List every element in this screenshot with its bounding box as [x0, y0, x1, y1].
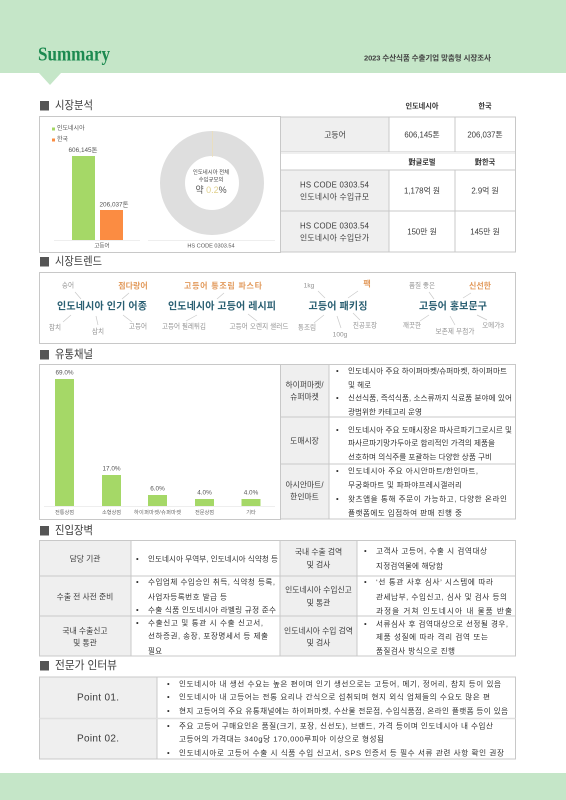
keywords: promotion phrases: 신선한 [469, 280, 492, 290]
bar chart: mackerel import: 고등어 [94, 242, 110, 250]
panel: market analysis charts [40, 116, 280, 252]
keywords: promotion phrases: 오메가3 [482, 320, 504, 330]
bar: traditional markets: 69.0% [55, 370, 74, 376]
heading: market analysis [40, 99, 93, 112]
table: entry barriers: • [364, 620, 367, 628]
table: distribution channels: • [336, 366, 339, 376]
heading: distribution channels: 유통채널 [55, 348, 93, 361]
header band [0, 0, 566, 85]
table: entry barriers: • [136, 618, 139, 628]
point 02 [77, 720, 504, 758]
table: entry barriers: 및 검사 [307, 560, 330, 570]
table: market data [280, 102, 516, 252]
table: distribution channels: 인도네시아 주요 아시안마트/한인마트, [348, 466, 478, 476]
point 02: 주요 고등어 구매요인은 품질(크기, 포장, 신선도), 브랜드, 가격 등이며 인도네시아 내 수입산 [179, 720, 493, 730]
point 01: 인도네시아 내 생선 수요는 높은 편이며 인기 생선으로는 고등어, 메기, 정어리, 참치 등이 있음 [179, 678, 501, 688]
table: entry barriers: 및 통관 [73, 638, 97, 648]
bar: others: 4.0% [244, 490, 259, 496]
report title: 2023 수산식품 수출기업 맞춤형 시장조사 [364, 52, 491, 62]
title: Summary [38, 44, 110, 66]
table: entry barriers: 과정을 거쳐 인도네시아 내 물품 반출 [376, 606, 512, 616]
heading: entry barriers [40, 524, 93, 537]
table: entry barriers: 및 검사 [307, 638, 330, 648]
table: entry barriers: 인도네시아 수입 검역 [284, 626, 353, 636]
keywords: popular species [49, 280, 148, 336]
keywords: promotion phrases: 깨끗한 [403, 320, 421, 330]
table: market data: 인도네시아 수입규모 [300, 192, 369, 202]
table: entry barriers: 관세납부, 수입신고, 심사 및 검사 등의 [376, 592, 507, 602]
donut chart: share: 인도네시아 전체 [193, 168, 229, 176]
table: entry barriers: • [364, 546, 367, 556]
table: entry barriers: • [364, 578, 367, 586]
legend: 인도네시아 [57, 124, 85, 132]
footer band [0, 773, 566, 800]
table: entry barriers: 선하증권, 송장, 포장명세서 등 제출 [148, 630, 268, 640]
bar: hypermarket: 6.0% [150, 486, 165, 492]
keywords: packaging [298, 278, 377, 338]
keywords: promotion phrases: 고등어 홍보문구 [419, 300, 487, 312]
table: distribution channels: 선호하며 의식주를 포괄하는 다양한 상품 구비 [348, 452, 492, 462]
table: distribution channels: 플랫폼에도 입점하여 판매 진행 중 [348, 508, 462, 518]
keywords: popular species: 점다랑어 [118, 280, 148, 290]
keywords: popular species: 인도네시아 인기 어종 [57, 300, 147, 312]
keywords: promotion phrases: 품질 좋은 [409, 282, 435, 290]
table: entry barriers: 인도네시아 무역부, 인도네시아 식약청 등 [148, 554, 278, 564]
keywords: popular species: 숭어 [62, 280, 74, 290]
table: entry barriers: 및 통관 [307, 598, 330, 608]
keywords: packaging: 팩 [363, 278, 371, 288]
table: entry barriers: 사업자등록번호 발급 등 [148, 592, 227, 602]
bar: small shops [102, 466, 121, 516]
table: expert interview [40, 677, 516, 759]
point 01: 인도네시아 내 고등어는 전통 요리나 간식으로 섭취되며 현지 외식 업체들의 수요도 많은 편 [179, 692, 490, 702]
keywords: promotion phrases: 보존제 무첨가 [436, 326, 474, 336]
table: entry barriers: 수출 식품 인도네시아 라벨링 규정 준수 [148, 604, 276, 614]
keywords: popular species: 참치 [49, 322, 61, 332]
point 01: • [167, 706, 170, 716]
donut chart: share: 약 0.2% [195, 184, 227, 195]
table: entry barriers: 지정검역물에 해당함 [376, 560, 443, 570]
heading: distribution channels [40, 348, 93, 361]
keywords: packaging: 고등어 패키징 [308, 300, 368, 312]
table: distribution channels: 인도네시아 주요 하이퍼마켓/슈퍼마켓, 하이퍼마트 [348, 366, 507, 376]
donut chart: share: HS CODE 0303.54 [187, 244, 235, 250]
table: market data: 145만 원 [470, 228, 500, 236]
table: entry barriers: 수출 전 사전 준비 [57, 592, 113, 602]
bar: hypermarket: 하이퍼마켓/슈퍼마켓 [134, 508, 181, 516]
bar: traditional markets: 전통상점 [55, 508, 74, 516]
bar: hypermarket [134, 486, 181, 516]
point 02: Point 02. [77, 734, 119, 744]
point 01: • [167, 692, 170, 702]
point 02: 인도네시아로 고등어 수출 시 식품 수입 신고서, SPS 인증서 등 필수 서류 관련 사항 확인 권장 [179, 748, 504, 758]
table: distribution channels: 인도네시아 주요 도매시장은 파사르파기그로시르 및 [348, 424, 512, 434]
table: entry barriers: 서류심사 후 검역대상으로 선정될 경우, [376, 618, 508, 628]
table: entry barriers: 수입업체 수입승인 취득, 식약청 등록, [148, 576, 275, 586]
table: distribution channels: 하이퍼마켓/ [285, 380, 324, 390]
keywords: popular species: 삼치 [92, 326, 104, 336]
keywords: recipes: 인도네시아 고등어 레시피 [168, 300, 276, 312]
heading: market trends [40, 255, 102, 268]
bar: specialty stores: 4.0% [197, 490, 212, 496]
bar: small shops: 17.0% [102, 466, 121, 472]
table: market data: 對글로벌 [408, 158, 436, 166]
heading: market analysis: 시장분석 [55, 99, 93, 112]
bar: others: 기타 [246, 508, 256, 516]
table: market data: 對한국 [475, 158, 496, 166]
table: market data: HS CODE 0303.54 [300, 180, 370, 190]
table: market data: HS CODE 0303.54 [300, 222, 370, 230]
table: entry barriers: 국내 수출신고 [62, 626, 108, 636]
keywords: packaging: 1kg [304, 282, 315, 290]
bar: others [242, 490, 260, 516]
bar: small shops: 소형상점 [102, 508, 121, 516]
table: entry barriers: 고객사 고등어, 수출 시 검역대상 [376, 546, 487, 556]
legend: 한국 [57, 136, 69, 143]
keywords: packaging: 100g [333, 332, 348, 338]
keywords: packaging: 통조림 [298, 324, 316, 332]
point 01: • [167, 680, 170, 688]
panel: market trends keyword map [40, 272, 516, 344]
bar chart: mackerel import: 206,037톤 [100, 200, 129, 208]
keywords: recipes: 고등어 오렌지 샐러드 [230, 322, 288, 330]
keywords: recipes: 고등어 필레튀김 [162, 322, 206, 330]
table: entry barriers: 필요 [148, 646, 162, 656]
point 01: Point 01. [77, 692, 119, 704]
keywords: packaging: 진공포장 [353, 320, 377, 330]
bar: specialty stores [195, 490, 214, 516]
table: market data: 150만 원 [407, 228, 437, 236]
table: distribution channels: • [336, 466, 339, 476]
point 02: 고등어의 가격대는 340g당 170,000루피아 이상으로 형성됨 [179, 734, 384, 744]
table: distribution channels: • [336, 394, 339, 402]
bar: specialty stores: 전문상점 [195, 508, 214, 516]
column headers [405, 102, 492, 110]
donut chart: share: 수입규모의 [199, 176, 223, 184]
table: distribution channels: 왓츠앱을 통해 주문이 가능하고, 다양한 온라인 [348, 494, 507, 504]
table: market data: 606,145톤 [404, 130, 440, 140]
legend [52, 124, 85, 143]
bar chart: mackerel import [54, 146, 140, 250]
table: market data: 1,178억 원 [404, 186, 440, 196]
table: market data: 206,037톤 [467, 130, 503, 140]
table: market data: 인도네시아 수입단가 [300, 232, 369, 242]
table: entry barriers: ‘선 통관 사후 심사’ 시스템에 따라 [376, 576, 493, 586]
table: entry barriers: 품질검사 방식으로 진행 [376, 646, 455, 656]
heading: expert interview: 전문가 인터뷰 [55, 659, 117, 672]
table: distribution channels: • [336, 426, 339, 434]
table: entry barriers [40, 540, 516, 656]
column headers: 인도네시아 [405, 102, 439, 110]
table: entry barriers: • [136, 606, 139, 614]
table: distribution channels: 아시안마트/ [285, 480, 324, 490]
table: entry barriers: • [136, 554, 139, 564]
keywords: popular species: 고등어 [129, 322, 147, 330]
table: distribution channels: 광범위한 카테고리 운영 [348, 406, 422, 416]
table: distribution channels: • [336, 494, 339, 504]
table: distribution channels: 슈퍼마켓 [290, 392, 319, 402]
table: market data: 고등어 [324, 130, 346, 140]
bar chart: mackerel import: 606,145톤 [69, 146, 98, 154]
table: entry barriers: 인도네시아 수입신고 [285, 584, 352, 594]
table: distribution channels: 및 헤로 [348, 380, 371, 390]
table: entry barriers: 제품 성질에 따라 격리 검역 또는 [376, 632, 488, 642]
keywords: promotion phrases [403, 280, 504, 336]
column headers: 한국 [478, 102, 492, 110]
point 02: • [167, 722, 170, 730]
donut chart: share [148, 131, 275, 250]
bar: traditional markets [55, 370, 74, 516]
point 02: • [167, 748, 170, 758]
table: entry barriers: • [136, 578, 139, 586]
heading: market trends: 시장트렌드 [55, 255, 102, 268]
table: distribution channels: 무궁화마트 및 파파야프레시갤러리 [348, 480, 462, 490]
table: distribution channels: 한인마트 [290, 492, 319, 502]
table: distribution channels: 도매시장 [290, 436, 319, 446]
point 01: 현지 고등어의 주요 유통채널에는 하이퍼마켓, 수산물 전문점, 수입식품점, 온라인 플랫폼 등이 있음 [179, 706, 508, 716]
point 01 [77, 678, 508, 716]
table: entry barriers: 수출신고 및 통관 시 수출 신고서, [148, 618, 263, 628]
table: entry barriers: 국내 수출 검역 [295, 546, 342, 556]
table: entry barriers: 담당 기관 [70, 554, 100, 564]
keywords: recipes: 고등어 통조림 파스타 [184, 280, 263, 290]
panel: distribution bar chart [40, 364, 280, 520]
table: distribution channels [280, 364, 516, 519]
heading: entry barriers: 진입장벽 [55, 524, 93, 537]
table: distribution channels: 신선식품, 즉석식품, 소스류까지 식료품 분야에 있어 [348, 392, 512, 402]
keywords: recipes [162, 280, 288, 330]
table: market data: 2.9억 원 [471, 186, 499, 196]
table: distribution channels: 파사르파기망가두아로 합리적인 가격의 제품을 [348, 438, 495, 448]
